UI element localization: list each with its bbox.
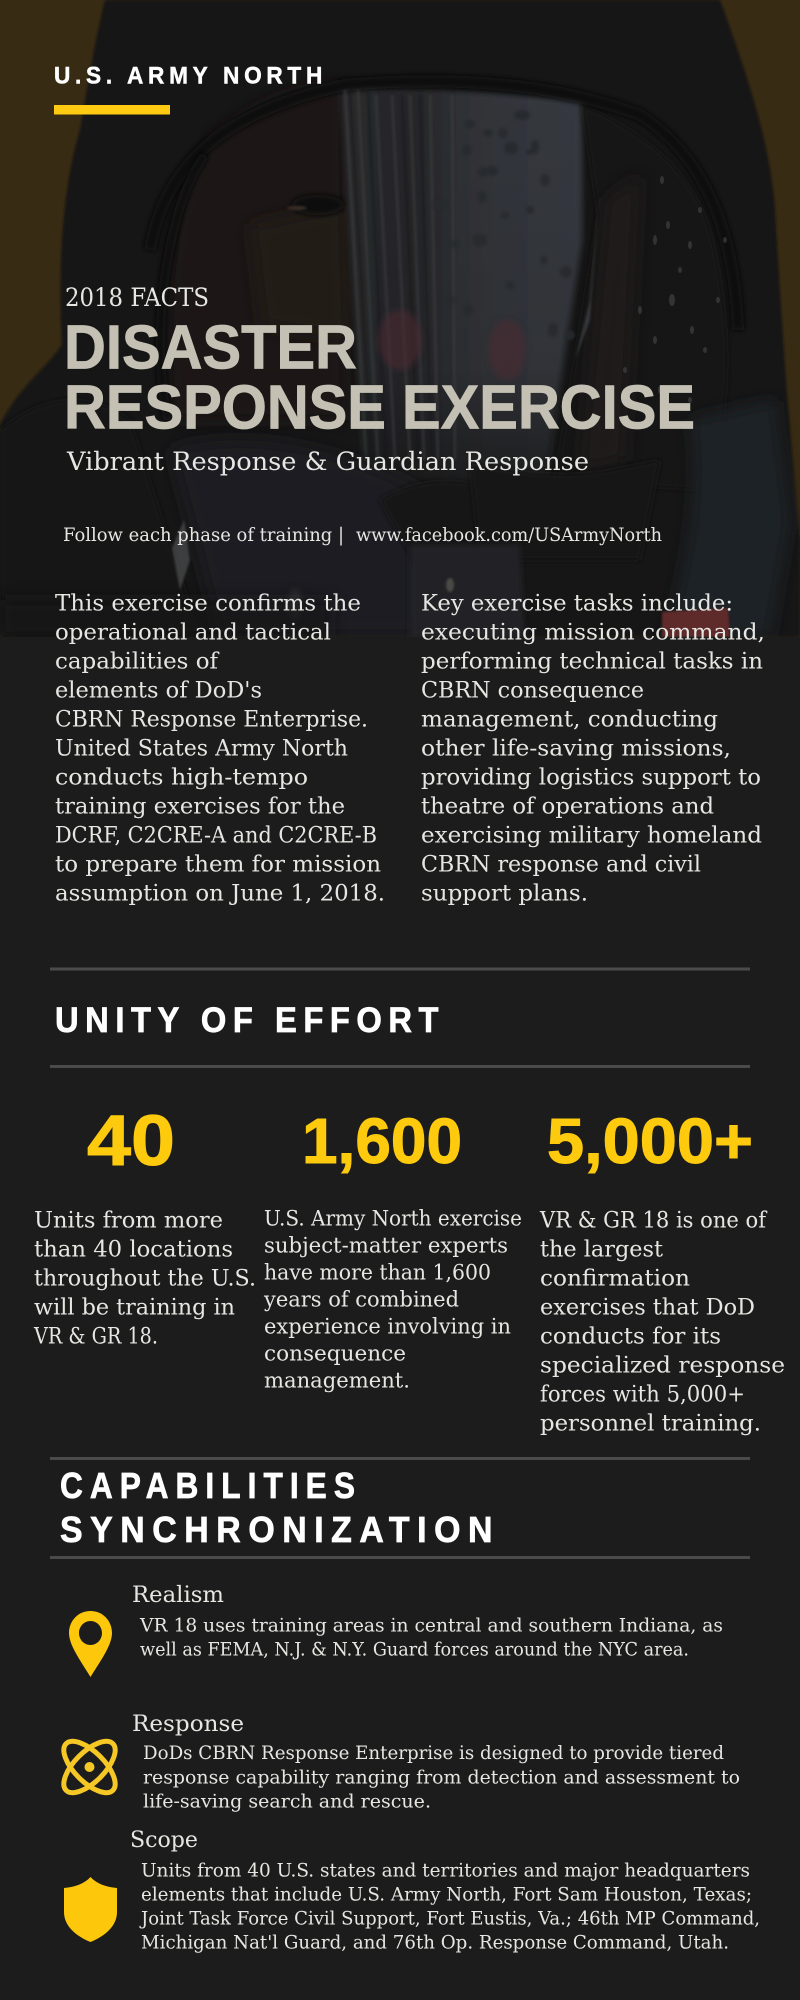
stat description: experience: U.S. Army North exercise [264,1207,522,1231]
stat description: personnel: confirmation [540,1266,690,1292]
realism heading: Realism [132,1583,224,1608]
intro text: right column: exercising military homeland [421,823,762,849]
stat description: locations: Units from more [34,1208,223,1234]
intro text: left column: training exercises for the [55,794,345,820]
response text: life-saving search and rescue. [143,1791,431,1813]
section heading: capabilities synchronization: CAPABILITIES [60,1465,362,1506]
intro text: right column [421,591,765,907]
scope text: elements that include U.S. Army North, Fort Sam Houston, Texas; [141,1884,752,1906]
stat description: locations: will be training in [34,1294,235,1320]
intro text: right column: CBRN response and civil [421,852,701,878]
icon: shield [64,1877,117,1942]
accent bar [54,105,170,114]
response text: DoDs CBRN Response Enterprise is designed to provide tiered [143,1742,724,1764]
year label: 2018 FACTS [65,283,209,312]
stat description: personnel: exercises that DoD [540,1294,755,1320]
stat: 40: 40 [87,1102,175,1181]
section heading: capabilities synchronization: SYNCHRONIZATION [60,1509,500,1550]
stat: 1,600: 1,600 [302,1105,462,1177]
stat description: experience: experience involving in [264,1315,511,1339]
light pane on mask edge [576,259,594,355]
section heading: unity of effort: UNITY OF EFFORT [55,1001,445,1040]
intro text: left column: United States Army North [55,736,348,762]
stat description: locations: throughout the U.S. [34,1266,256,1292]
eye [292,195,344,215]
brand heading: U.S. ARMY NORTH [54,63,327,90]
realism text [139,1615,723,1661]
main title [64,314,695,443]
scope text: Joint Task Force Civil Support, Fort Eustis, Va.; 46th MP Command, [139,1907,760,1929]
intro text: right column: management, conducting [421,707,718,733]
intro text: left column: This exercise confirms the [55,591,361,617]
stat description: locations [33,1208,256,1350]
response heading: Response [132,1712,244,1737]
scope text: Units from 40 U.S. states and territories and major headquarters [141,1860,750,1882]
intro text: right column: executing mission command, [421,620,765,646]
section heading: capabilities synchronization [60,1465,500,1550]
intro text: left column: CBRN Response Enterprise. [55,707,368,733]
intro text: left column [55,591,385,907]
stat description: personnel: personnel training. [540,1410,761,1436]
scope text: Michigan Nat'l Guard, and 76th Op. Response Command, Utah. [141,1931,729,1953]
stat description: experience: subject-matter experts [264,1234,508,1258]
subtitle: Vibrant Response & Guardian Response [66,447,589,477]
follow line: www.facebook.com/USArmyNorth [356,524,662,546]
hero photo: responder in gas mask [0,0,800,637]
response text: response capability ranging from detection and assessment to [143,1767,740,1789]
right hood speckles [623,176,727,403]
stat description: experience: consequence [264,1342,406,1366]
visor streaks [345,90,455,460]
main title: RESPONSE EXERCISE [64,374,695,443]
follow line [63,524,662,546]
stat: 5,000+: 5,000+ [547,1105,753,1177]
stat description: personnel: the largest [540,1236,663,1262]
mask frame [150,81,738,330]
intro text: right column: support plans. [421,881,588,907]
intro text: left column: capabilities of [55,649,220,675]
scope text [139,1860,760,1953]
response text [143,1742,740,1813]
stat description: personnel [539,1208,785,1436]
stat description: experience: years of combined [263,1288,459,1312]
intro text: right column: performing technical tasks in [421,649,763,675]
intro text: right column: providing logistics support to [421,765,761,791]
intro text: right column: theatre of operations and [421,794,714,820]
intro text: left column: elements of DoD's [55,678,262,704]
intro text: right column: CBRN consequence [421,678,644,704]
follow line: Follow each phase of training | [63,524,344,546]
equipment below the mask [0,428,1,429]
intro text: left column: operational and tactical [55,620,331,646]
stat description: personnel: specialized response [540,1352,785,1378]
stat description: locations: than 40 locations [34,1236,233,1262]
realism text: VR 18 uses training areas in central and southern Indiana, as [139,1615,723,1637]
icon: location pin [69,1611,112,1677]
intro text: right column: other life-saving missions, [421,736,731,762]
stat description: experience [263,1207,522,1393]
scope heading: Scope [130,1828,198,1853]
realism text: well as FEMA, N.J. & N.Y. Guard forces around the NYC area. [140,1639,689,1661]
stat description: personnel: VR & GR 18 is one of [539,1208,768,1234]
stat description: experience: have more than 1,600 [264,1261,491,1285]
visor droplets [452,110,575,340]
stat description: personnel: forces with 5,000+ [540,1382,745,1408]
intro text: left column: DCRF, C2CRE-A and C2CRE-B [55,823,377,849]
red reflections [378,310,422,370]
intro text: left column: assumption on June 1, 2018. [55,881,385,907]
stat description: personnel: conducts for its [540,1324,721,1350]
intro text: left column: conducts high-tempo [55,765,308,791]
intro text: left column: to prepare them for mission [55,852,381,878]
intro text: right column: Key exercise tasks include: [421,591,733,617]
stat description: experience: management. [264,1369,410,1393]
stat description: locations: VR & GR 18. [33,1324,158,1350]
icon: atom [56,1733,123,1801]
main title: DISASTER [64,314,357,383]
